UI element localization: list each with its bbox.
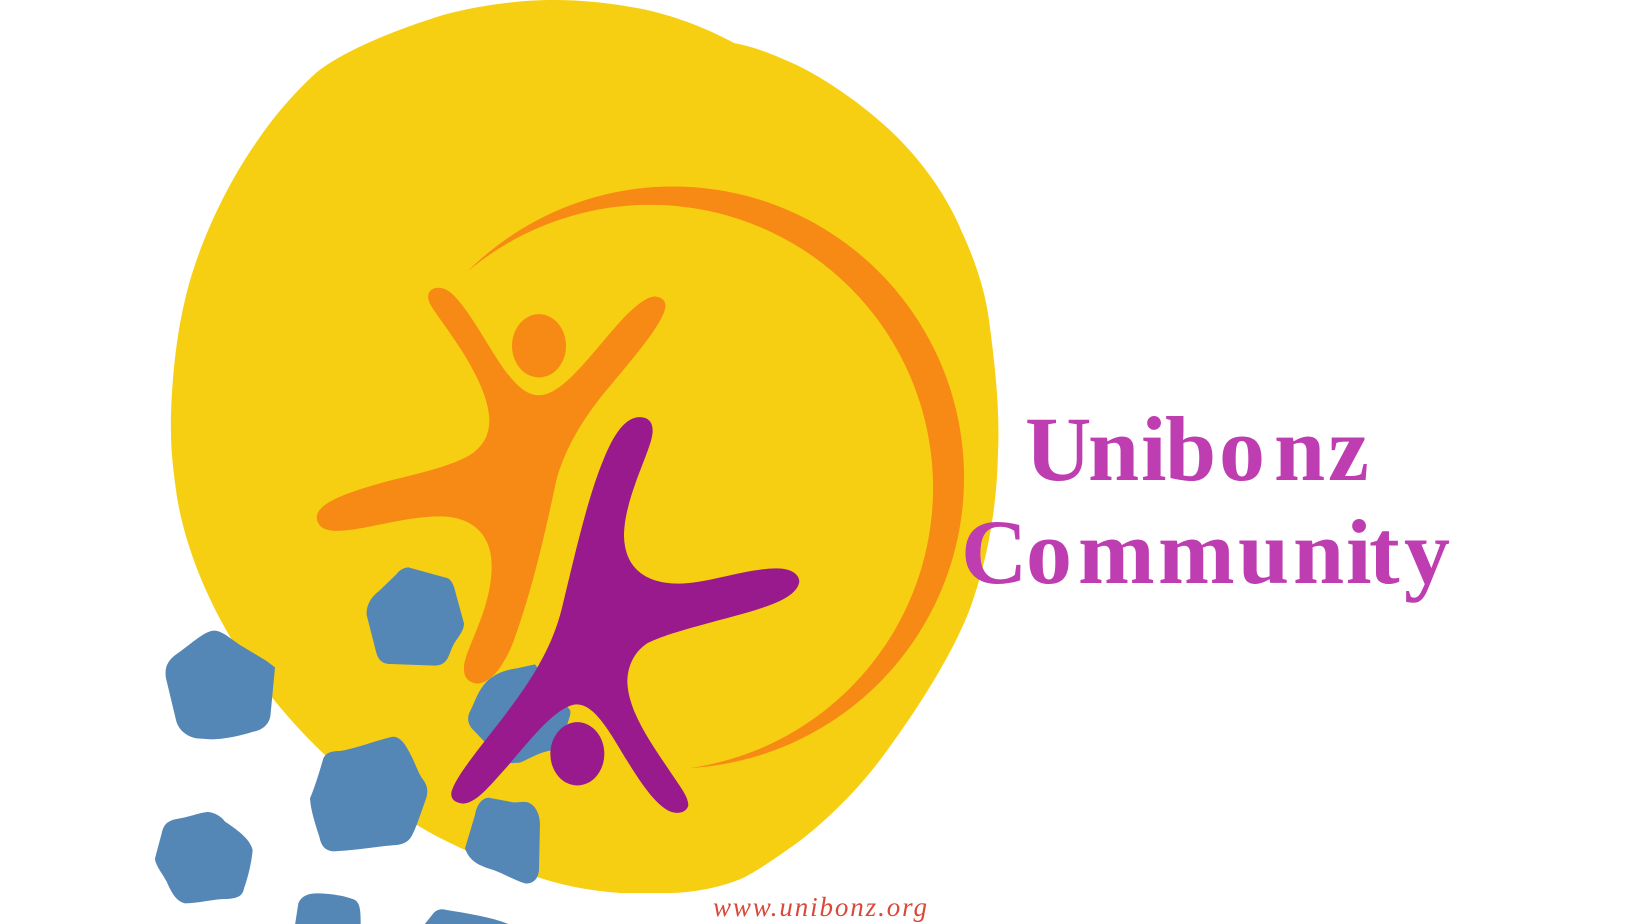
orange figure body	[317, 288, 665, 684]
title line 1: Unibonz	[1025, 398, 1369, 500]
stone: bottom clipped right	[424, 909, 508, 924]
stone: lower right	[465, 798, 540, 883]
stone: upper centre	[367, 567, 464, 666]
stone: lower centre large	[310, 737, 427, 851]
title line 2: Community	[961, 501, 1450, 603]
stone: behind purple figure	[468, 664, 570, 763]
stone: upper left	[166, 631, 275, 739]
blue stones group	[155, 567, 570, 924]
stone: bottom clipped left	[295, 893, 361, 924]
website url: www.unibonz.org	[713, 892, 927, 922]
yellow background blob	[171, 0, 998, 893]
orange crescent arc	[467, 186, 964, 768]
orange figure head	[512, 314, 566, 377]
purple figure body	[451, 417, 799, 813]
purple figure	[451, 417, 799, 813]
stone: lower left	[155, 812, 253, 903]
orange figure	[317, 288, 665, 684]
purple figure head	[550, 722, 604, 785]
